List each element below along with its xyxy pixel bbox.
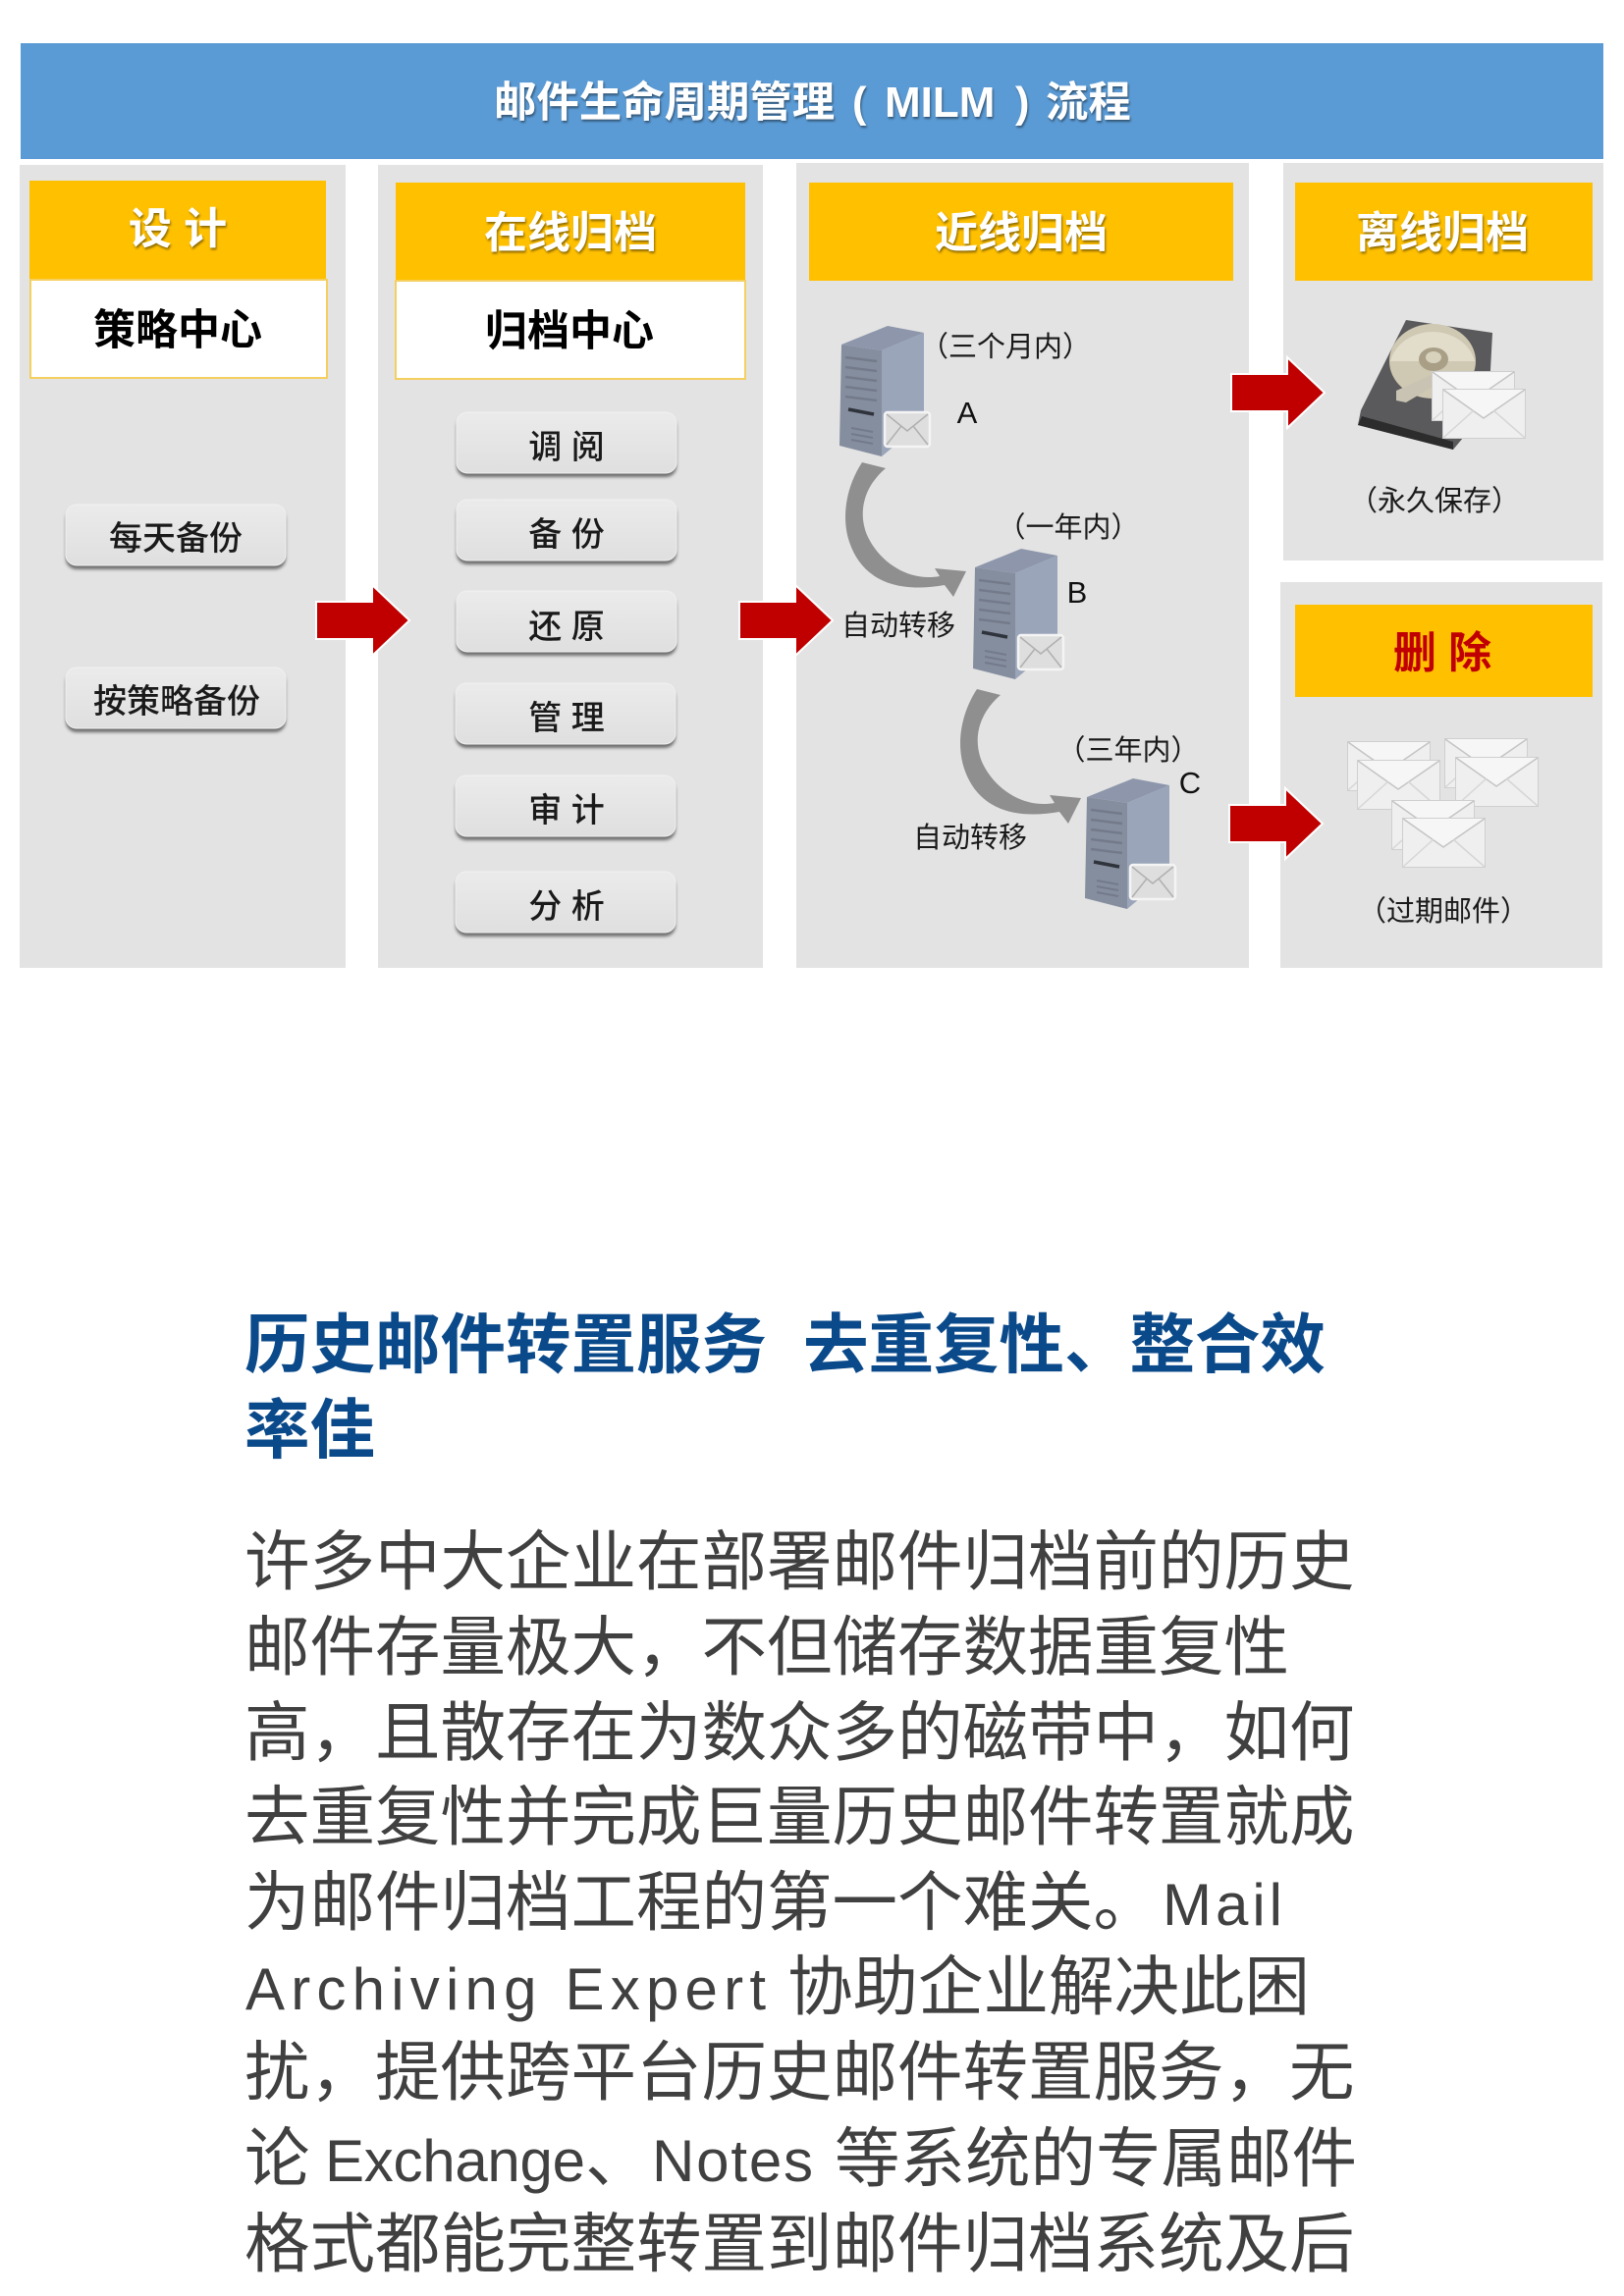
design header: 设 计 — [129, 205, 227, 253]
panel: offline archive — [1283, 163, 1603, 561]
button: policy backup — [66, 667, 286, 732]
button: backup: 备 份 — [528, 516, 605, 554]
server B: （一年内） — [997, 511, 1140, 544]
body paragraph: 论 — [244, 2123, 310, 2196]
delete header: 删 除 — [1393, 629, 1491, 677]
body paragraph: 等系统的专属邮件 — [835, 2123, 1357, 2196]
server C: （三年内） — [1056, 734, 1200, 767]
server A — [839, 326, 1091, 456]
body paragraph: 扰，提供跨平台历史邮件转置服务，无 — [244, 2037, 1355, 2109]
panel: delete — [1280, 582, 1602, 968]
policy center box: 策略中心 — [93, 307, 262, 354]
label: auto transfer 1: 自动转移 — [841, 610, 955, 642]
arrow: online to nearline — [739, 585, 833, 656]
title banner: ) — [1015, 80, 1029, 127]
body paragraph: Notes — [652, 2128, 813, 2194]
button: manage — [456, 683, 676, 748]
title banner: 流程 — [1046, 80, 1131, 127]
server B: B — [1067, 575, 1087, 610]
icon: hard drive with envelopes — [1358, 320, 1526, 450]
body paragraph: 高，且散存在为数众多的磁带中，如何 — [244, 1697, 1355, 1770]
body paragraph: Exchange — [325, 2128, 585, 2194]
body paragraph: 、 — [585, 2123, 650, 2196]
panel: design — [20, 165, 346, 968]
body paragraph: 许多中大企业在部署邮件归档前的历史 — [244, 1526, 1355, 1599]
body paragraph — [244, 1526, 1357, 2281]
archive center box — [396, 281, 745, 379]
label: auto transfer 2: 自动转移 — [913, 822, 1027, 854]
heading: historical mail migration: 历史邮件转置服务 — [244, 1309, 767, 1382]
button: audit: 审 计 — [528, 792, 605, 829]
server A: （三个月内） — [920, 331, 1091, 363]
arrow: nearline to delete — [1229, 788, 1323, 859]
button: retrieve — [457, 412, 677, 477]
title banner: ( — [852, 80, 867, 127]
button: daily backup: 每天备份 — [109, 520, 243, 558]
title banner: 邮件生命周期管理 — [494, 80, 835, 127]
server B — [973, 511, 1140, 679]
button: analyse: 分 析 — [528, 888, 605, 926]
body paragraph: 邮件存量极大，不但储存数据重复性 — [244, 1612, 1289, 1684]
button: backup — [457, 500, 677, 564]
title banner — [21, 43, 1603, 159]
label: kept forever: （永久保存） — [1349, 485, 1520, 517]
curved arrow A to B — [845, 462, 966, 597]
body paragraph: Archiving Expert — [245, 1956, 766, 2022]
icon: expired envelopes — [1347, 738, 1538, 868]
arrow: nearline to offline — [1231, 357, 1325, 428]
nearline header — [809, 183, 1233, 281]
curved arrow B to C — [960, 689, 1081, 824]
server A: A — [957, 396, 978, 430]
body paragraph: 协助企业解决此困 — [787, 1951, 1310, 2024]
button: audit — [456, 775, 676, 840]
panel: nearline archive — [796, 163, 1249, 968]
heading: historical mail migration: 率佳 — [244, 1395, 375, 1468]
server C: C — [1179, 766, 1201, 800]
server C — [1056, 734, 1201, 909]
button: daily backup — [66, 505, 286, 569]
button: retrieve: 调 阅 — [528, 429, 605, 466]
archive center box: 归档中心 — [485, 308, 654, 355]
nearline header: 近线归档 — [935, 209, 1108, 257]
body paragraph: 为邮件归档工程的第一个难关。 — [244, 1867, 1159, 1940]
heading: historical mail migration: 去重复性、整合效 — [803, 1309, 1326, 1382]
design header — [29, 181, 326, 279]
offline header: 离线归档 — [1356, 209, 1529, 257]
panel: online archive — [378, 165, 763, 968]
body paragraph: 格式都能完整转置到邮件归档系统及后 — [244, 2209, 1355, 2281]
body paragraph: Mail — [1163, 1872, 1282, 1938]
title banner: MILM — [885, 79, 995, 127]
online archive header — [396, 183, 745, 281]
delete header — [1295, 605, 1593, 697]
button: restore — [457, 591, 677, 656]
button: manage: 管 理 — [528, 700, 605, 737]
arrow: design to online — [316, 585, 409, 656]
button: analyse — [456, 872, 676, 936]
policy center box — [30, 280, 327, 378]
button: policy backup: 按策略备份 — [93, 683, 260, 721]
button: restore: 还 原 — [528, 609, 605, 646]
label: expired mail: （过期邮件） — [1358, 895, 1529, 928]
offline header — [1295, 183, 1593, 281]
online archive header: 在线归档 — [484, 209, 657, 257]
body paragraph: 去重复性并完成巨量历史邮件转置就成 — [244, 1782, 1355, 1854]
